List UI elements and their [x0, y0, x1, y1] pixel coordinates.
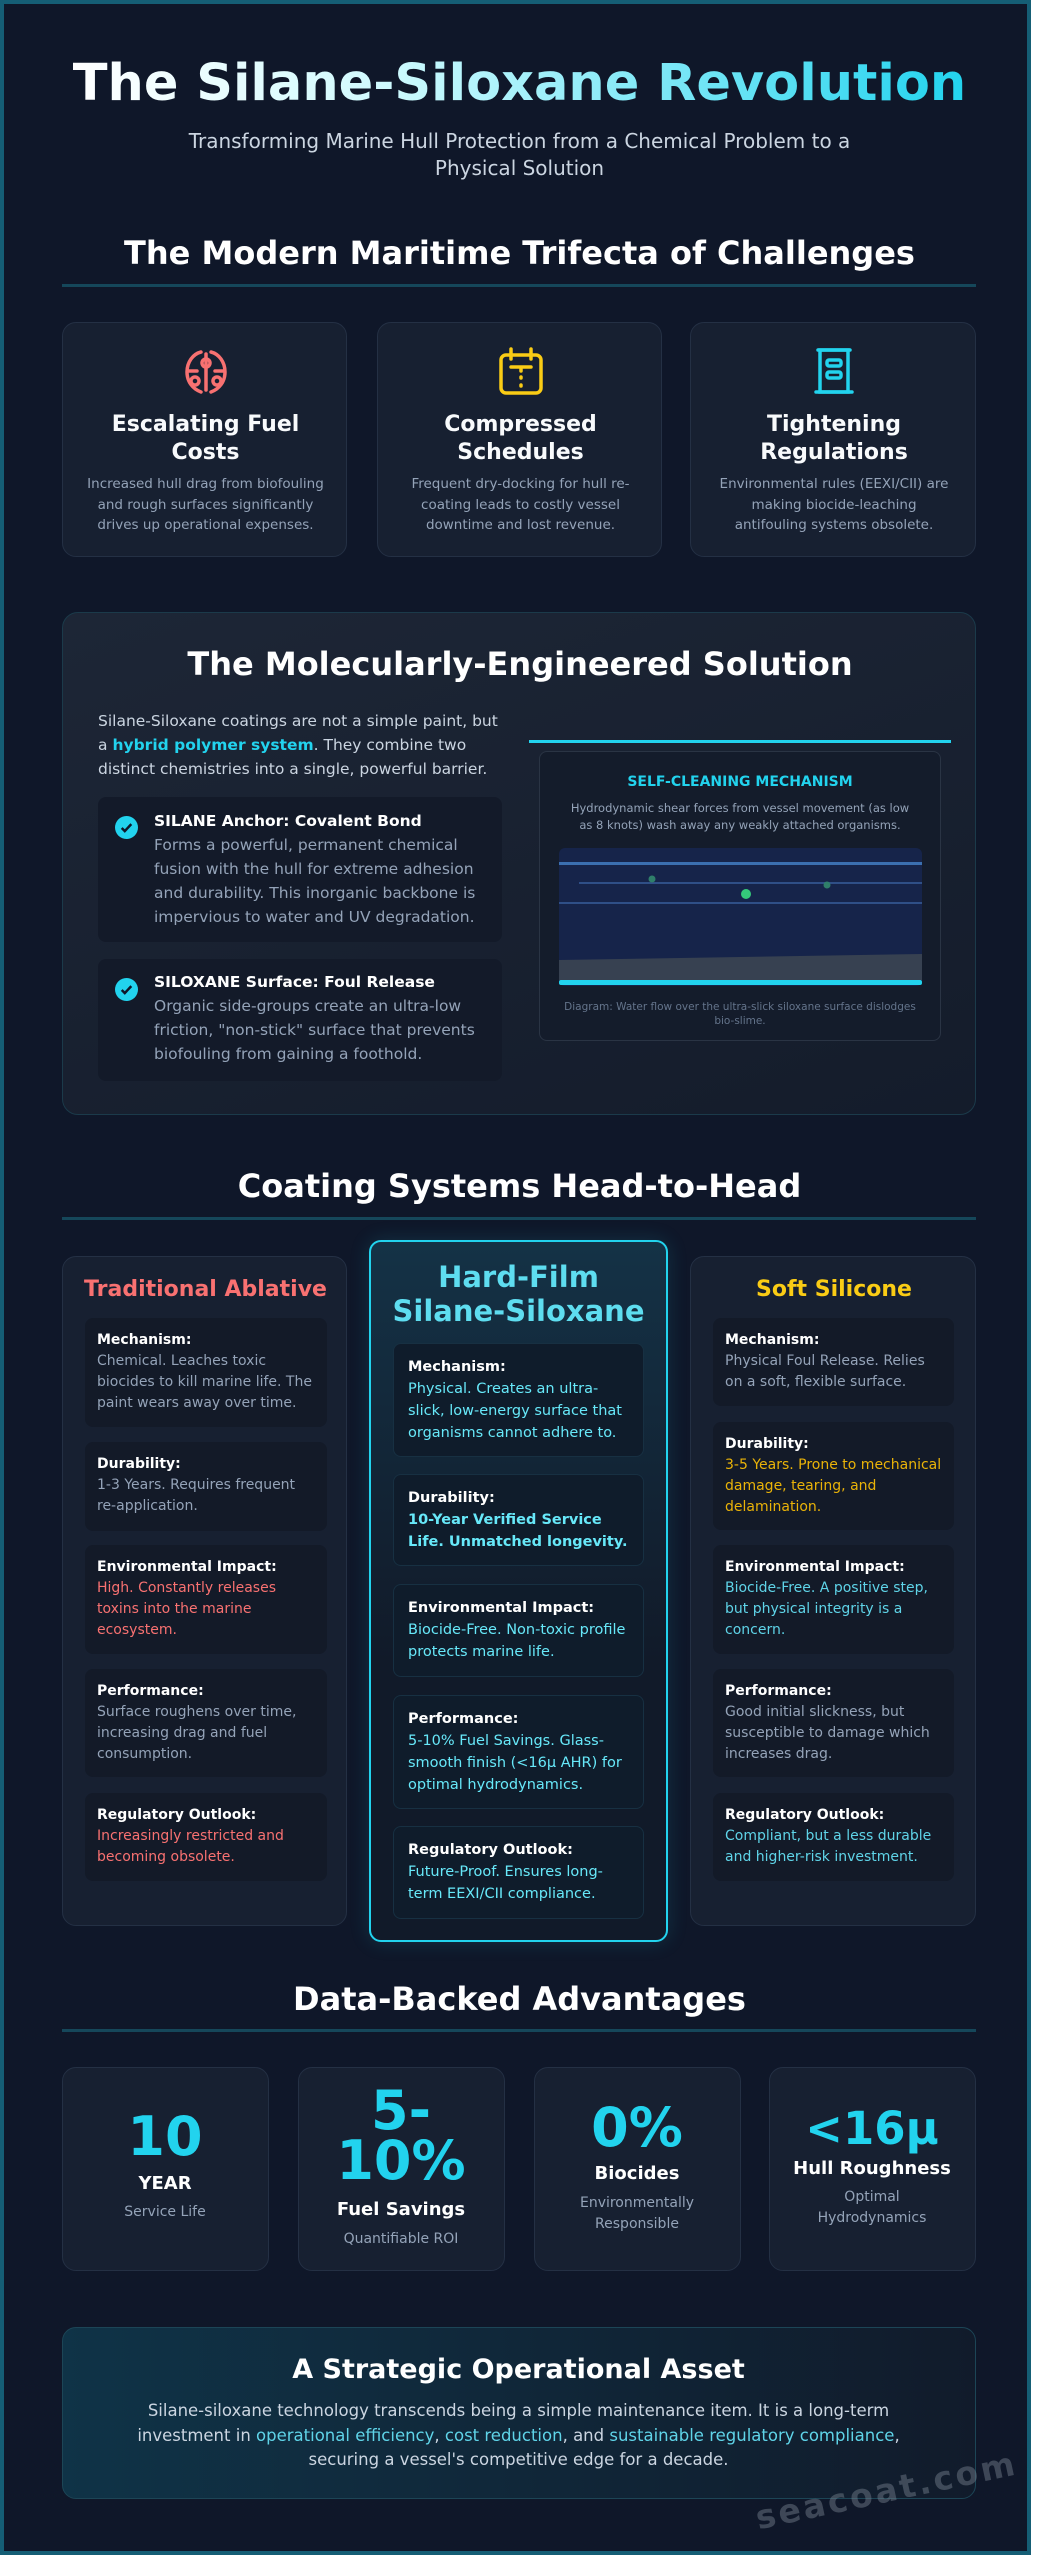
row: hard performance: smooth finish (<16μ AHR) for — [408, 1755, 622, 1771]
row: hard performance: optimal hydrodynamics. — [408, 1777, 583, 1793]
row: soft environment: Environmental Impact: — [725, 1559, 905, 1575]
row: ablative durability: re-application. — [97, 1498, 198, 1514]
diagram: water flow — [559, 848, 922, 986]
panel: schedules — [377, 322, 662, 557]
text: regulations title: Regulations — [760, 440, 908, 465]
row: hard durability — [393, 1474, 644, 1566]
text: regulations desc: antifouling systems obsolete. — [735, 517, 933, 533]
text: strategic: Silane-siloxane technology transcends being a simple maintenance item. It is a long-term — [148, 2401, 889, 2420]
stat: biocides: Biocides — [595, 2163, 679, 2184]
text: fuel desc — [87, 476, 324, 533]
stat: biocides: Environmentally — [580, 2195, 694, 2211]
row: ablative performance: Surface roughens over time, — [97, 1704, 296, 1720]
stat: 10 year — [62, 2067, 269, 2271]
row: hard durability: Durability: — [408, 1490, 495, 1506]
text: schedules title: Compressed — [444, 412, 597, 437]
text: intro: distinct chemistries into a single, powerful barrier. — [98, 760, 487, 778]
text: silane: SILANE Anchor: Covalent Bond — [154, 812, 422, 830]
text: siloxane: friction, "non-stick" surface that prevents — [154, 1021, 475, 1039]
row: hard durability: Life. Unmatched longevity. — [408, 1534, 627, 1550]
text: intro: a hybrid polymer system. They combine two — [98, 736, 466, 754]
stat: fuel savings: 5- — [371, 2079, 431, 2142]
row: ablative regulatory: Regulatory Outlook: — [97, 1807, 256, 1823]
row: ablative environment: Environmental Impact: — [97, 1559, 277, 1575]
text: regulations desc: making biocide-leaching — [751, 496, 917, 512]
text: intro — [98, 712, 498, 778]
row: soft performance: Performance: — [725, 1683, 832, 1699]
row: ablative durability: Durability: — [97, 1456, 181, 1472]
row: soft performance: susceptible to damage which — [725, 1725, 930, 1741]
row: soft regulatory — [713, 1793, 954, 1881]
row: ablative performance: Performance: — [97, 1683, 204, 1699]
text: regulations desc: Environmental rules (EEXI/CII) are — [720, 476, 948, 492]
row: hard mechanism: Physical. Creates an ultra- — [408, 1381, 598, 1397]
stat: hull roughness: <16μ — [805, 2102, 939, 2155]
row: ablative regulatory: Increasingly restricted and — [97, 1828, 284, 1844]
text: fuel desc: Increased hull drag from biofouling — [87, 476, 324, 492]
row: soft durability — [713, 1422, 954, 1530]
stat: biocides — [534, 2067, 741, 2271]
stat: biocides: 0% — [591, 2096, 683, 2159]
row: hard mechanism — [393, 1343, 644, 1457]
row: soft regulatory: Compliant, but a less durable — [725, 1828, 931, 1844]
stat: fuel savings — [298, 2067, 505, 2271]
heading: soft silicone: Soft Silicone — [756, 1277, 912, 1302]
row: ablative environment: toxins into the marine — [97, 1601, 251, 1617]
row: hard regulatory: Future-Proof. Ensures long- — [408, 1864, 603, 1880]
stat: biocides: Responsible — [595, 2216, 679, 2232]
row: soft durability: 3-5 Years. Prone to mechanical — [725, 1457, 941, 1473]
row: soft environment: but physical integrity is a — [725, 1601, 902, 1617]
heading: ablative: Traditional Ablative — [84, 1277, 327, 1302]
text: fuel title: Escalating Fuel — [112, 412, 299, 437]
panel: solution — [62, 612, 976, 1115]
row: hard environment: protects marine life. — [408, 1644, 555, 1660]
row: hard durability: 10-Year Verified Service — [408, 1512, 602, 1528]
row: soft environment: concern. — [725, 1622, 785, 1638]
text: mechanism desc: Hydrodynamic shear forces from vessel movement (as low — [571, 801, 909, 815]
heading: hard-film: Silane-Siloxane — [393, 1294, 644, 1328]
box: siloxane surface — [98, 959, 502, 1081]
row: hard mechanism: slick, low-energy surface that — [408, 1403, 622, 1419]
row: soft regulatory: Regulatory Outlook: — [725, 1807, 884, 1823]
icon: check — [115, 816, 138, 839]
text: strategic: securing a vessel's competitive edge for a decade. — [308, 2450, 728, 2469]
row: ablative regulatory: becoming obsolete. — [97, 1849, 235, 1865]
row: soft durability: Durability: — [725, 1436, 809, 1452]
text: silane: fusion with the hull for extreme adhesion — [154, 860, 474, 878]
row: soft environment — [713, 1545, 954, 1654]
text: regulations title: Tightening — [767, 412, 901, 437]
row: ablative regulatory — [85, 1793, 327, 1881]
stat: fuel savings: 10% — [336, 2129, 466, 2192]
text: schedules desc: coating leads to costly vessel — [421, 496, 620, 512]
row: soft performance: Good initial slickness, but — [725, 1704, 904, 1720]
icon: fuel — [185, 350, 227, 394]
row: hard performance — [393, 1695, 644, 1809]
text: strategic — [137, 2401, 900, 2469]
stat: fuel savings: Quantifiable ROI — [344, 2231, 458, 2247]
box: silane anchor — [98, 797, 502, 942]
row: soft performance: increases drag. — [725, 1746, 832, 1762]
text: siloxane: Organic side-groups create an ultra-low — [154, 997, 461, 1015]
text: siloxane: biofouling from gaining a foothold. — [154, 1045, 422, 1063]
panel: strategic asset — [62, 2327, 976, 2499]
row: soft mechanism — [713, 1318, 954, 1406]
text: regulations desc — [720, 476, 948, 533]
heading: head-to-head: Coating Systems Head-to-Head — [238, 1167, 801, 1205]
text: fuel title — [112, 412, 299, 465]
text: siloxane: SILOXANE Surface: Foul Release — [154, 973, 435, 991]
stat: 10 year: Service Life — [124, 2204, 206, 2220]
stat: hull roughness — [769, 2067, 976, 2271]
panel: regulations — [690, 322, 976, 557]
row: ablative performance: increasing drag and fuel — [97, 1725, 267, 1741]
title: The Silane-Siloxane Revolution — [73, 54, 966, 113]
row: soft mechanism: Physical Foul Release. Relies — [725, 1353, 925, 1369]
text: strategic: investment in operational efficiency, cost reduction, and sustainable regulatory compliance, — [137, 2426, 900, 2444]
row: ablative durability — [85, 1442, 327, 1531]
text: fuel desc: and rough surfaces significantly — [98, 496, 313, 512]
panel: soft silicone — [690, 1256, 976, 1926]
row: hard environment: Environmental Impact: — [408, 1600, 594, 1616]
text: fuel desc: drives up operational expenses. — [97, 517, 314, 533]
watermark: seacoat.com — [752, 2444, 1021, 2537]
row: hard environment: Biocide-Free. Non-toxic profile — [408, 1622, 625, 1638]
row: soft durability: delamination. — [725, 1499, 821, 1515]
stat: hull roughness: Hull Roughness — [793, 2158, 951, 2179]
row: soft performance — [713, 1669, 954, 1777]
row: ablative mechanism: Chemical. Leaches toxic — [97, 1353, 266, 1369]
stat: fuel savings: Fuel Savings — [337, 2199, 465, 2220]
text: siloxane — [154, 973, 475, 1063]
row: ablative mechanism: Mechanism: — [97, 1332, 191, 1348]
row: hard mechanism: organisms cannot adhere to. — [408, 1425, 616, 1441]
text: schedules title: Schedules — [457, 440, 584, 465]
row: ablative environment — [85, 1545, 327, 1654]
heading: solution: The Molecularly-Engineered Solution — [187, 645, 853, 683]
text: caption — [564, 1001, 916, 1027]
text: intro: Silane-Siloxane coatings are not a simple paint, but — [98, 712, 498, 730]
icon: cabinet — [814, 348, 854, 394]
stat: hull roughness: Hydrodynamics — [818, 2210, 926, 2226]
panel: fuel costs — [62, 322, 347, 557]
panel: hard-film silane-siloxane — [369, 1240, 668, 1942]
row: soft durability: damage, tearing, and — [725, 1478, 876, 1494]
text: regulations title — [760, 412, 908, 465]
row: soft mechanism: on a soft, flexible surface. — [725, 1374, 906, 1390]
row: hard environment — [393, 1584, 644, 1677]
row: hard performance: 5-10% Fuel Savings. Glass- — [408, 1733, 604, 1749]
row: hard regulatory: Regulatory Outlook: — [408, 1842, 573, 1858]
text: mechanism desc: as 8 knots) wash away any weakly attached organisms. — [579, 818, 901, 832]
row: ablative durability: 1-3 Years. Requires frequent — [97, 1477, 295, 1493]
icon: calendar — [499, 347, 543, 395]
heading: hard-film — [393, 1260, 644, 1328]
text: schedules desc: downtime and lost revenue. — [426, 517, 615, 533]
text: caption: bio-slime. — [714, 1015, 766, 1027]
row: hard regulatory — [393, 1826, 644, 1919]
panel: self-cleaning — [539, 751, 941, 1041]
row: ablative performance — [85, 1669, 327, 1777]
text: silane: and durability. This inorganic backbone is — [154, 884, 475, 902]
text: mechanism desc — [571, 801, 909, 832]
text: schedules desc: Frequent dry-docking for hull re- — [411, 476, 630, 492]
icon: check — [115, 978, 138, 1001]
text: schedules desc — [411, 476, 630, 533]
row: ablative mechanism — [85, 1318, 327, 1427]
row: hard regulatory: term EEXI/CII compliance. — [408, 1886, 596, 1902]
stat: 10 year: 10 — [127, 2105, 203, 2168]
row: hard performance: Performance: — [408, 1711, 518, 1727]
subtitle: Transforming Marine Hull Protection from a Chemical Problem to a Physical Solution — [189, 129, 850, 180]
heading: strategic asset: A Strategic Operational Asset — [292, 2354, 745, 2385]
panel: traditional ablative — [62, 1256, 347, 1926]
stat: hull roughness: Optimal — [844, 2189, 900, 2205]
row: ablative mechanism: paint wears away over time. — [97, 1395, 296, 1411]
text: schedules title — [444, 412, 597, 465]
row: soft mechanism: Mechanism: — [725, 1332, 819, 1348]
row: ablative environment: High. Constantly releases — [97, 1580, 276, 1596]
row: hard mechanism: Mechanism: — [408, 1359, 506, 1375]
text: fuel title: Costs — [172, 440, 239, 465]
row: soft regulatory: and higher-risk investment. — [725, 1849, 918, 1865]
row: soft environment: Biocide-Free. A positive step, — [725, 1580, 928, 1596]
heading: data-backed: Data-Backed Advantages — [293, 1980, 746, 2018]
row: ablative mechanism: biocides to kill marine life. The — [97, 1374, 312, 1390]
text: caption: Diagram: Water flow over the ultra-slick siloxane surface dislodges — [564, 1001, 916, 1013]
row: ablative performance: consumption. — [97, 1746, 192, 1762]
heading: hard-film: Hard-Film — [438, 1260, 599, 1294]
text: silane: impervious to water and UV degradation. — [154, 908, 475, 926]
row: ablative environment: ecosystem. — [97, 1622, 177, 1638]
text: silane: Forms a powerful, permanent chemical — [154, 836, 458, 854]
heading: trifecta: The Modern Maritime Trifecta of Challenges — [124, 234, 915, 272]
text: mechanism title: SELF-CLEANING MECHANISM — [627, 774, 853, 790]
text: silane — [154, 812, 475, 926]
stat: 10 year: YEAR — [138, 2173, 192, 2194]
